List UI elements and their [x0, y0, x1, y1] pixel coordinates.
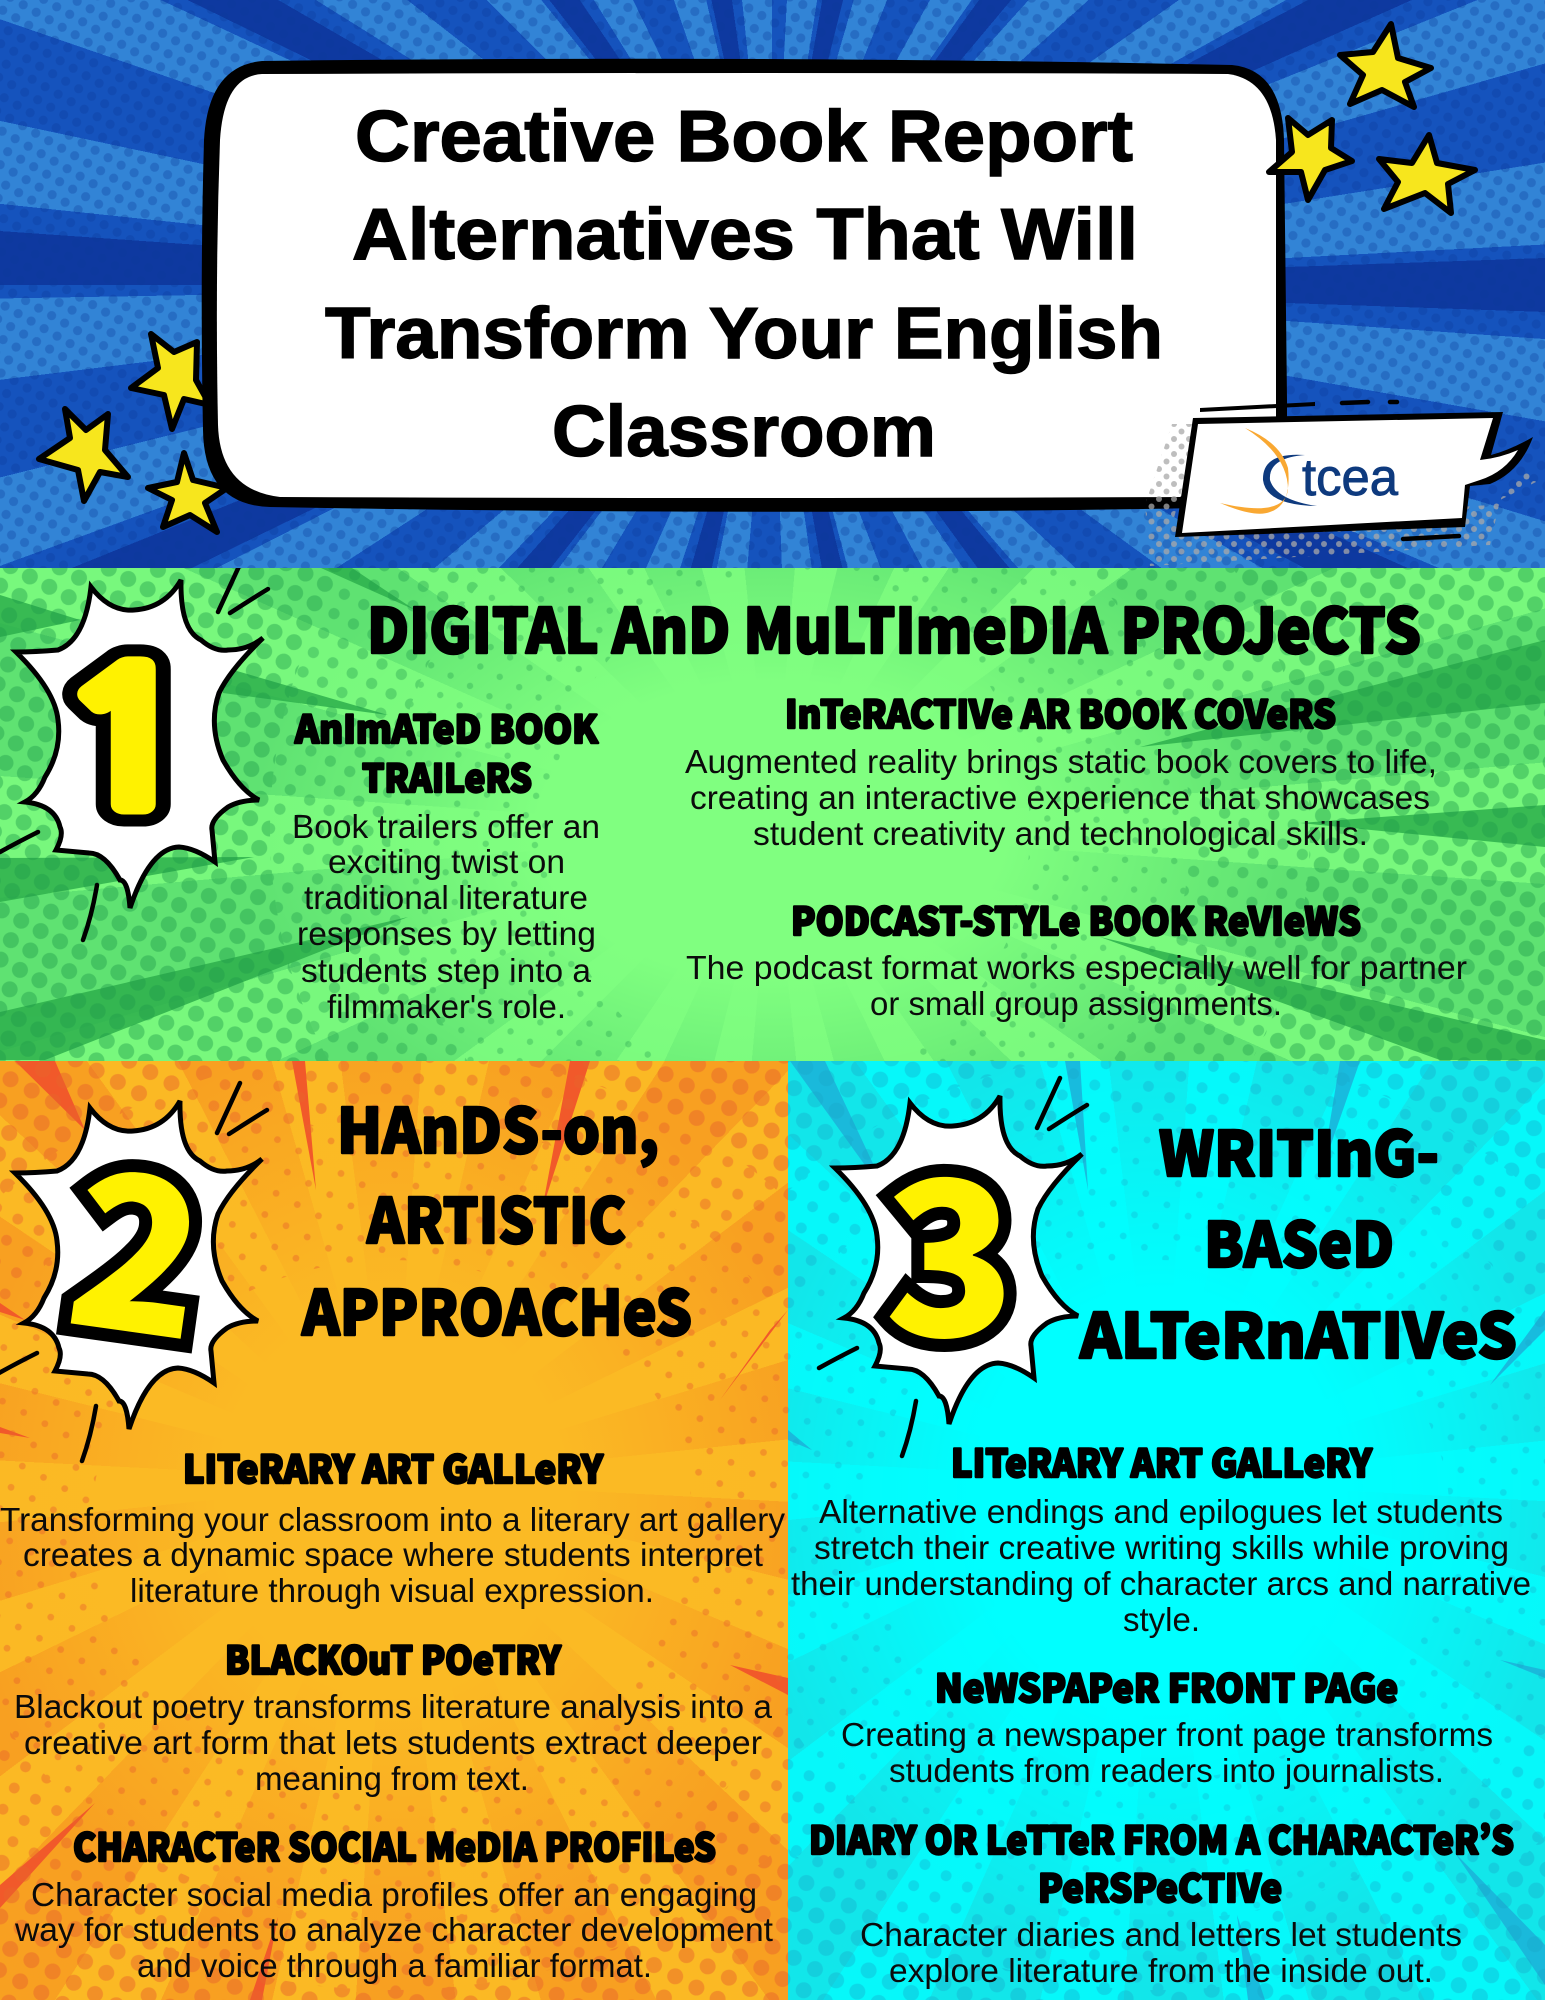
item: character social media profiles: Character social media profiles offer an engaging — [31, 1876, 757, 1913]
item: blackout poetry: BLACKOuT POeTRY — [225, 1630, 562, 1685]
logo wordmark: tcea — [1302, 449, 1398, 507]
title: Classroom — [552, 392, 936, 472]
item: podcast-style book reviews: PODCAST-STYLe BOOK ReVIeWS — [791, 891, 1361, 946]
icon: star upper left — [131, 334, 210, 429]
number 1: 1 — [57, 649, 199, 834]
heading: hands-on artistic approaches — [301, 1081, 692, 1353]
item: animated book trailers — [292, 699, 600, 1025]
item: animated book trailers: Book trailers offer an — [292, 808, 600, 845]
item: character social media profiles: and voice through a familiar format. — [137, 1947, 652, 1984]
heading: hands-on artistic approaches: ARTISTIC — [366, 1171, 626, 1261]
item: literary art gallery: Transforming your classroom into a literary art gallery — [0, 1501, 785, 1538]
panel: hands-on artistic approaches — [0, 1061, 788, 2000]
item: diary or letter: Character diaries and letters let students — [860, 1916, 1462, 1953]
title — [325, 97, 1163, 472]
icon: tcea logo arcs — [1220, 428, 1317, 514]
title: Creative Book Report — [355, 97, 1133, 177]
title: Alternatives That Will — [352, 195, 1138, 275]
item: animated book trailers: filmmaker's role. — [327, 988, 566, 1025]
panel: writing-based alternatives — [788, 1061, 1545, 2000]
icon: number 1 burst — [0, 562, 268, 940]
item: interactive AR book covers: student creativity and technological skills. — [753, 815, 1368, 852]
logo speech bubble — [1145, 402, 1540, 566]
icon: star top right — [1340, 24, 1431, 107]
item: animated book trailers: AnImATeD BOOK — [294, 699, 599, 754]
item: diary or letter: DIARY OR LeTTeR FROM A CHARACTeR’S — [809, 1810, 1514, 1865]
item: interactive AR book covers: creating an interactive experience that showcases — [690, 779, 1430, 816]
icon: number 3 burst — [819, 1078, 1087, 1456]
item: literary art gallery — [791, 1433, 1531, 1638]
heading: writing-based alternatives: WRITInG- — [1159, 1104, 1439, 1194]
item: podcast-style book reviews: or small group assignments. — [870, 985, 1282, 1022]
heading: digital and multimedia projects: DIGITAL AnD MuLTImeDIA PROJeCTS — [367, 581, 1421, 671]
item: newspaper front page: students from readers into journalists. — [889, 1752, 1444, 1789]
item: diary or letter: explore literature from the inside out. — [889, 1952, 1433, 1989]
item: newspaper front page: Creating a newspaper front page transforms — [841, 1716, 1493, 1753]
item: literary art gallery: their understanding of character arcs and narrative — [791, 1565, 1531, 1602]
heading: writing-based alternatives: ALTeRnATIVeS — [1079, 1286, 1517, 1376]
number 1: 1 — [57, 649, 199, 834]
item: literary art gallery — [0, 1439, 785, 1609]
item: animated book trailers: students step into a — [301, 952, 592, 989]
icon: star far right — [1379, 135, 1475, 213]
item: literary art gallery: Alternative endings and epilogues let students — [819, 1493, 1503, 1530]
item: diary or letter — [809, 1810, 1514, 1989]
panel: blue header — [0, 0, 1545, 568]
item: literary art gallery: creates a dynamic space where students interpret — [23, 1536, 763, 1573]
dark ray spikes — [0, 568, 1545, 1060]
item: literary art gallery: stretch their creative writing skills while proving — [814, 1529, 1509, 1566]
item: podcast-style book reviews: The podcast format works especially well for partner — [686, 949, 1467, 986]
item: character social media profiles: CHARACTeR SOCIAL MeDIA PROFILeS — [73, 1817, 716, 1872]
icon: number 3 burst: 3 — [885, 1087, 1015, 1398]
item: newspaper front page — [841, 1658, 1493, 1789]
item: blackout poetry: creative art form that lets students extract deeper — [24, 1724, 762, 1761]
panel: digital and multimedia projects — [0, 568, 1545, 1061]
icon: star bottom left — [148, 453, 227, 532]
item: blackout poetry: Blackout poetry transforms literature analysis into a — [14, 1688, 773, 1725]
item: blackout poetry — [14, 1630, 773, 1797]
item: animated book trailers: TRAILeRS — [362, 748, 532, 803]
item: literary art gallery: LITeRARY ART GALLeRY — [183, 1439, 604, 1494]
item: literary art gallery: style. — [1123, 1601, 1200, 1638]
item: character social media profiles: way for students to analyze character development — [14, 1911, 773, 1948]
item: interactive AR book covers: Augmented reality brings static book covers to life, — [685, 743, 1437, 780]
icon: number 2 burst: 2 — [53, 1076, 226, 1402]
item: interactive AR book covers — [685, 684, 1437, 852]
heading: hands-on artistic approaches: HAnDS-on, — [337, 1081, 659, 1171]
item: newspaper front page: NeWSPAPeR FRONT PAGe — [935, 1658, 1398, 1713]
item: literary art gallery: literature through visual expression. — [130, 1572, 654, 1609]
item: podcast-style book reviews — [686, 891, 1467, 1022]
item: diary or letter: PeRSPeCTIVe — [1038, 1858, 1282, 1913]
icon: number 2 burst — [0, 1076, 267, 1461]
item: animated book trailers: traditional literature — [304, 879, 588, 916]
heading: writing-based alternatives: BASeD — [1204, 1195, 1394, 1285]
title: Transform Your English — [325, 294, 1163, 374]
item: literary art gallery: LITeRARY ART GALLeRY — [951, 1433, 1373, 1488]
item: animated book trailers: responses by letting — [297, 915, 596, 952]
dark ray spikes — [788, 1061, 1545, 2000]
title box — [202, 59, 1287, 512]
item: interactive AR book covers: InTeRACTIVe AR BOOK COVeRS — [785, 684, 1336, 739]
heading: hands-on artistic approaches: APPROACHeS — [301, 1263, 692, 1353]
item: blackout poetry: meaning from text. — [255, 1760, 529, 1797]
item: character social media profiles — [14, 1817, 773, 1984]
icon: star lower left — [39, 409, 128, 501]
item: animated book trailers: exciting twist on — [328, 843, 565, 880]
icon: star overlapping title box — [1269, 118, 1352, 200]
dark ray spikes — [0, 1061, 788, 2000]
heading: writing-based alternatives — [1079, 1104, 1517, 1376]
